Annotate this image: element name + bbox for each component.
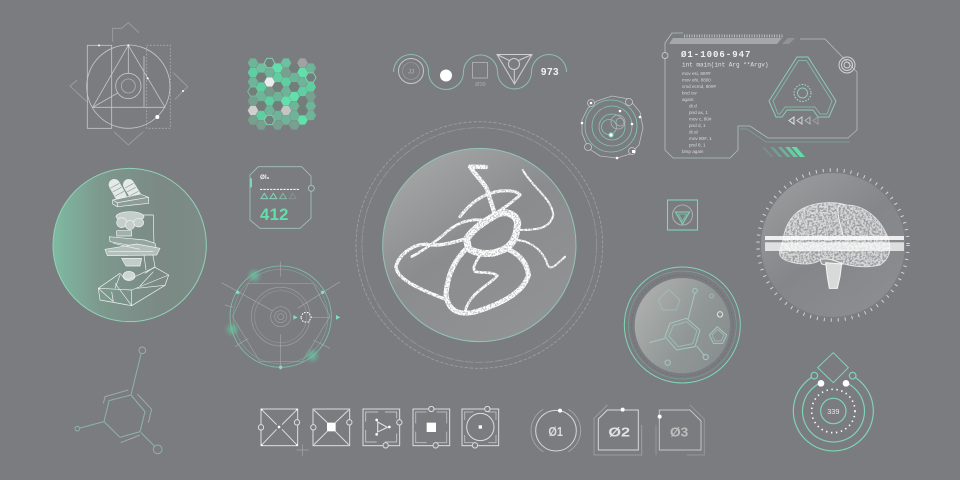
- code lines: pnd d, 1: [689, 123, 706, 128]
- diamond: [818, 353, 848, 383]
- ring emblem: [793, 353, 873, 451]
- icon: pyramid square: [311, 409, 352, 446]
- side marker: [250, 178, 252, 187]
- panel title: Ø1-1006-947: [681, 50, 751, 60]
- badge 02: [594, 405, 642, 455]
- code label: 973: [541, 67, 559, 78]
- honeycomb heat grid: [248, 58, 316, 130]
- circle dial: JJ: [408, 70, 414, 76]
- code lines: bnd cw: [682, 90, 697, 96]
- tick ring: [758, 170, 908, 320]
- white nodes: [818, 380, 849, 387]
- status card: [250, 167, 314, 228]
- brain scan lens: [758, 170, 908, 320]
- molecule lens: [624, 267, 740, 383]
- triangle emblem: [497, 54, 532, 84]
- node dots: [236, 291, 324, 369]
- code lines: mov 80#, 1: [689, 136, 712, 141]
- code lines: pnd 8, 1: [689, 142, 706, 148]
- green hatch: [762, 147, 805, 157]
- code lines: dt al: [689, 130, 698, 134]
- code lines: dt d: [689, 104, 697, 108]
- header bars: [669, 38, 795, 44]
- triangular emblem: [769, 57, 836, 117]
- node: [308, 185, 314, 191]
- card label: Øl₆: [260, 174, 270, 181]
- dashed hexagon marker: [301, 313, 311, 322]
- inner grey rings: [611, 115, 625, 129]
- code lines: again:: [682, 97, 695, 102]
- brain disc: [761, 173, 905, 317]
- triangle badge: [668, 200, 698, 230]
- glow blobs: [227, 271, 317, 361]
- code lines: bmp again: [682, 149, 704, 154]
- microscope lens: [53, 168, 206, 322]
- green rings: [585, 100, 637, 152]
- specimen disc: [383, 148, 576, 342]
- central specimen lens: [356, 122, 603, 368]
- code lines: pnd ax, 1: [689, 110, 708, 115]
- node circles: [584, 98, 636, 154]
- filament organism: [396, 167, 565, 313]
- icon: solid square: [413, 406, 450, 448]
- hatched header: [684, 34, 783, 38]
- lens disc: [53, 168, 206, 322]
- triangle row: [789, 117, 818, 124]
- badge 03: Ø3: [670, 426, 688, 440]
- inner accent line: [740, 129, 850, 142]
- pointers: [293, 315, 340, 320]
- microscope: [98, 183, 169, 306]
- numbered badges: [531, 405, 704, 455]
- code terminal panel: [662, 33, 857, 158]
- outer polygon: [582, 96, 643, 158]
- node dots: [581, 102, 641, 159]
- icon: circle square: [462, 406, 499, 448]
- top wave widget strip: [394, 54, 566, 90]
- badge 01: [531, 409, 581, 452]
- left node: [662, 52, 668, 58]
- glass disc: [635, 278, 730, 373]
- badge 01: Ø1: [548, 425, 563, 439]
- wave line: [394, 55, 566, 90]
- icon: crossed square: [258, 409, 300, 446]
- outer arcs: [793, 372, 873, 451]
- code lines: mov ehi, 8800: [682, 78, 711, 82]
- white dot: [440, 70, 452, 82]
- square with code: [472, 62, 488, 88]
- square with code: Ø39: [475, 82, 486, 88]
- dark dashed ring: [632, 275, 733, 376]
- panel outline: [665, 33, 857, 158]
- code lines: cmd ecmd, 80##: [682, 84, 716, 89]
- frame and rings: [232, 283, 330, 362]
- dashed divider: [260, 188, 299, 191]
- dotted ring: [812, 389, 855, 433]
- badge 02: Ø2: [608, 426, 630, 440]
- green value: 412: [260, 205, 289, 224]
- right concentric node: [839, 57, 855, 73]
- badge 03: [656, 405, 704, 455]
- outer ring: [624, 267, 740, 383]
- circle dial: [398, 58, 424, 84]
- outer dashed rings: [356, 122, 603, 368]
- center code: 339: [827, 407, 839, 416]
- code subtitle: int main(int Arg **Argv): [682, 62, 768, 68]
- card frame: [250, 167, 311, 228]
- scan bars: [765, 236, 904, 251]
- hexagon molecule: [75, 347, 162, 454]
- orbital diagram: [581, 96, 643, 159]
- bottom icon row: [258, 406, 499, 456]
- code lines: [682, 71, 716, 154]
- geometric construction diagram: [70, 23, 188, 145]
- icon: triangle square: [363, 409, 402, 448]
- small cross: [297, 444, 309, 456]
- molecule structure: [649, 288, 727, 365]
- brain: [779, 203, 890, 288]
- outer rings: [230, 266, 331, 367]
- radar target: [222, 262, 340, 370]
- level triangles: [261, 193, 296, 199]
- inner ring: [628, 271, 736, 379]
- crosshair lines: [222, 262, 340, 370]
- code lines: mov c, 80#: [689, 116, 712, 122]
- code lines: mov esi, 80##: [682, 71, 711, 76]
